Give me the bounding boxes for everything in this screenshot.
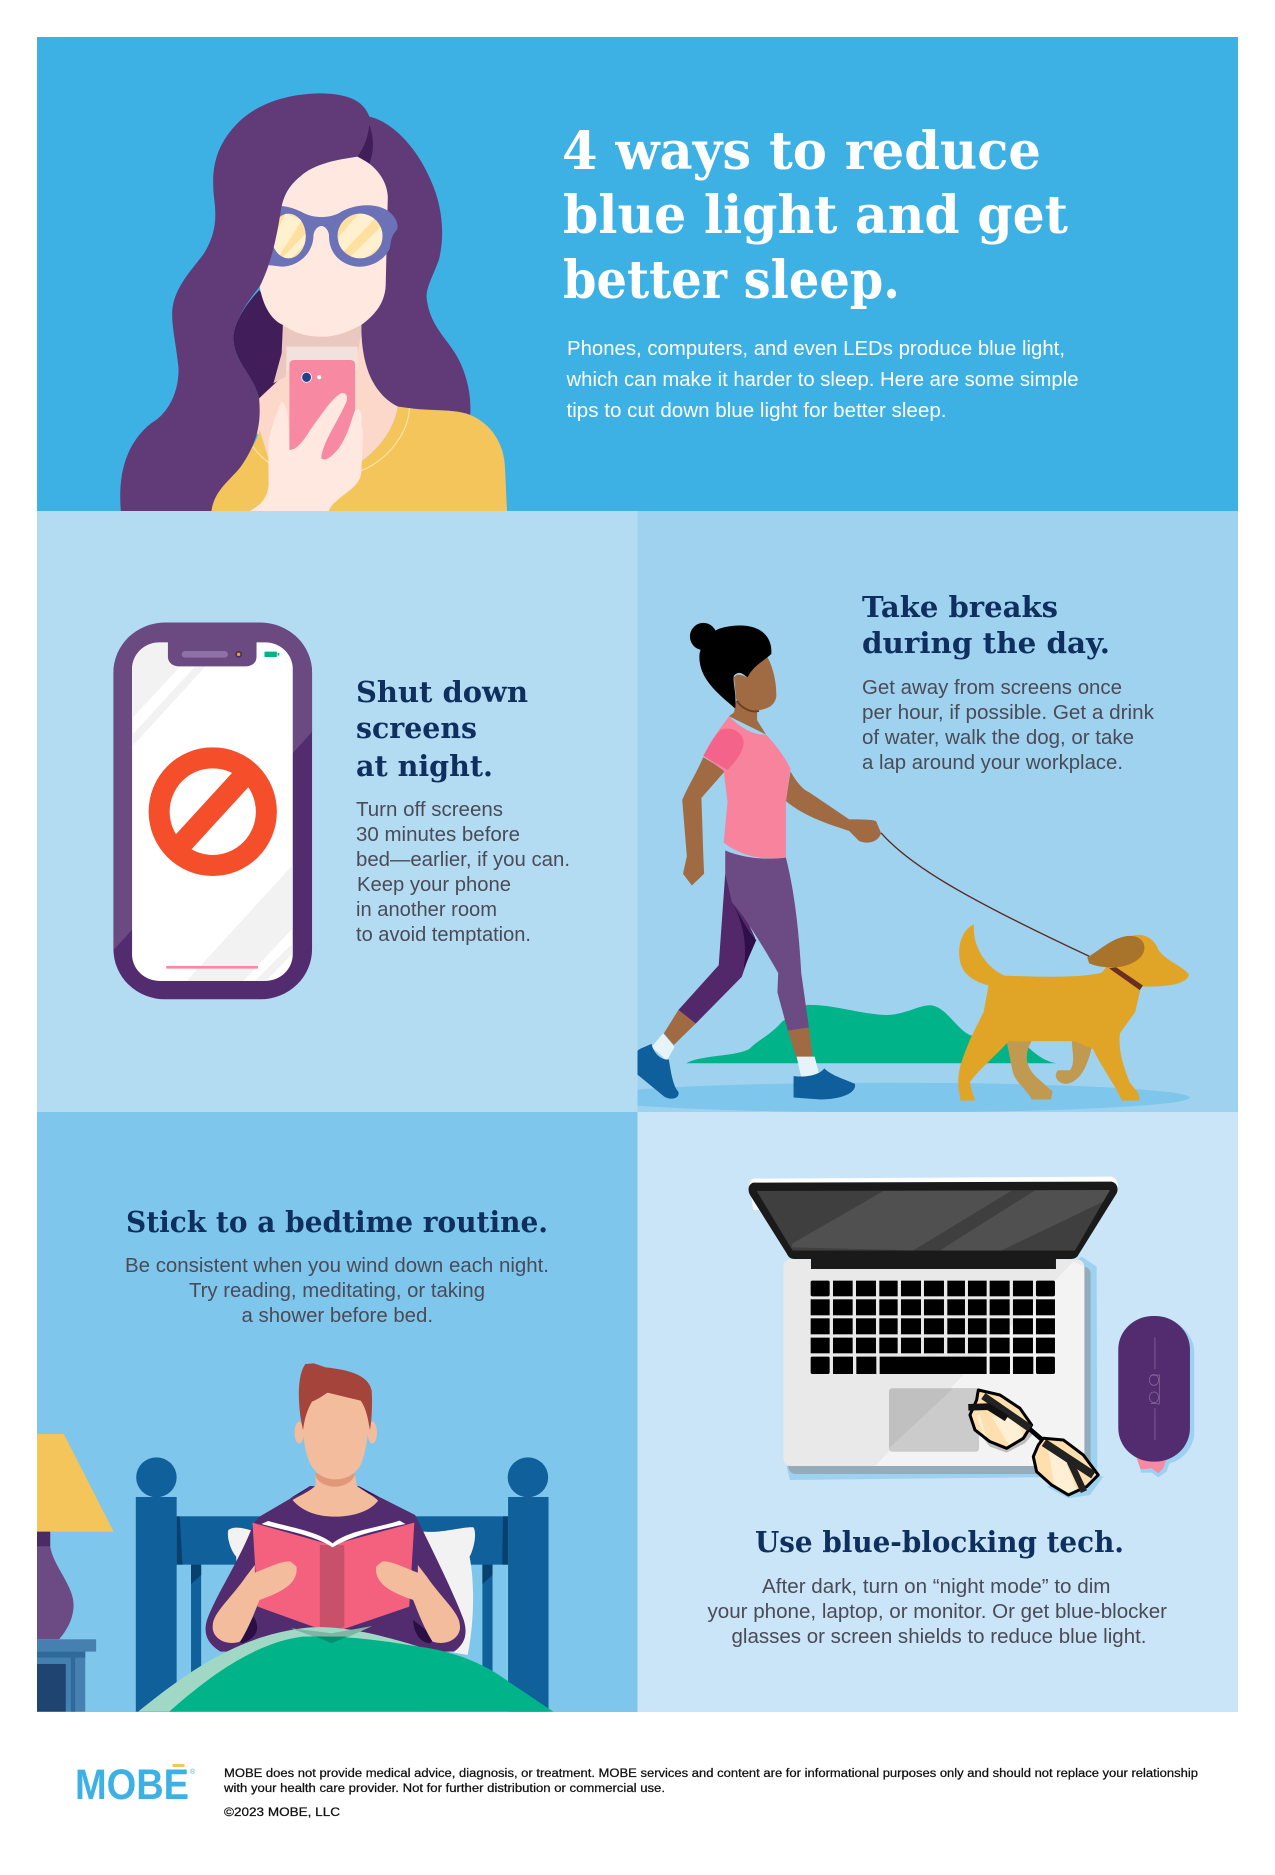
body text: a lap around your workplace.: [862, 752, 1123, 774]
dog: [958, 924, 1189, 1101]
icon: phone with prohibition sign: [113, 622, 312, 1000]
illustration: laptop, glasses and case: [749, 1177, 1194, 1498]
hero heading: better sleep.: [563, 250, 900, 311]
footer disclaimer: [223, 1768, 1198, 1819]
face: [260, 157, 388, 337]
footer disclaimer: with your health care provider. Not for further distribution or commercial use.: [223, 1783, 665, 1795]
pillow: [228, 1527, 475, 1655]
bed frame: [136, 1457, 549, 1712]
hero body text: [565, 338, 1078, 422]
trackpad: [889, 1388, 979, 1452]
hero heading: blue light and get: [563, 185, 1068, 246]
heading: [862, 590, 1110, 660]
panel: bedtime routine: [37, 1112, 638, 1712]
phone: [289, 360, 355, 460]
body text: Try reading, meditating, or taking: [189, 1280, 485, 1302]
glasses: [253, 205, 398, 267]
book: [253, 1521, 414, 1633]
heading: during the day.: [862, 626, 1110, 660]
footer disclaimer: ©2023 MOBE, LLC: [224, 1807, 340, 1819]
glasses case: [1118, 1316, 1194, 1477]
illustration: woman walking dog: [589, 623, 1190, 1112]
heading: [356, 675, 528, 783]
panel: take breaks: [589, 511, 1238, 1112]
body text: [356, 799, 570, 946]
body text: in another room: [356, 899, 497, 921]
illustration: woman with glasses holding a phone: [120, 93, 507, 511]
lamp and nightstand: [37, 1434, 114, 1712]
body text: Keep your phone: [357, 874, 511, 896]
screen: [749, 1177, 1118, 1210]
heading: Stick to a bedtime routine.: [126, 1205, 548, 1239]
body text: [125, 1255, 549, 1327]
body text: bed—earlier, if you can.: [356, 849, 570, 871]
glasses: [968, 1390, 1103, 1498]
woman: [632, 623, 881, 1099]
body text: [862, 677, 1155, 774]
heading: Shut down: [356, 675, 528, 709]
heading: at night.: [356, 749, 493, 783]
body text: to avoid temptation.: [356, 924, 531, 946]
panel: shut down screens: [37, 511, 638, 1112]
body text: per hour, if possible. Get a drink: [862, 702, 1155, 724]
logo: MOBE: ®: [190, 1768, 196, 1776]
body text: glasses or screen shields to reduce blue light.: [732, 1626, 1146, 1648]
logo: MOBE: MOBE: [75, 1761, 189, 1809]
body text: Get away from screens once: [862, 677, 1122, 699]
hair front: [120, 93, 369, 511]
body text: 30 minutes before: [356, 824, 520, 846]
panel: hero: [37, 37, 1238, 511]
hero heading: [562, 121, 1068, 311]
body text: Turn off screens: [356, 799, 503, 821]
hero heading: 4 ways to reduce: [562, 121, 1041, 182]
body text: After dark, turn on “night mode” to dim: [762, 1576, 1110, 1598]
body text: your phone, laptop, or monitor. Or get blue-blocker: [708, 1601, 1167, 1623]
panel: blue-blocking tech: [638, 1112, 1238, 1712]
blanket: [138, 1626, 553, 1712]
body text: Be consistent when you wind down each night.: [125, 1255, 549, 1277]
heading: Use blue-blocking tech.: [755, 1525, 1124, 1559]
hand: [250, 393, 363, 511]
keyboard: [811, 1281, 1055, 1374]
man: [206, 1363, 466, 1652]
hero body text: Phones, computers, and even LEDs produce blue light,: [567, 338, 1065, 360]
laptop: [749, 1177, 1118, 1480]
body text: of water, walk the dog, or take: [862, 727, 1134, 749]
leash: [881, 833, 1089, 956]
illustration: man reading in bed with lamp: [37, 1363, 553, 1712]
body text: [708, 1576, 1167, 1648]
hinge: [811, 1255, 1056, 1269]
footer disclaimer: MOBE does not provide medical advice, diagnosis, or treatment. MOBE services and content are for informational purposes only and should not replace your relationship: [224, 1768, 1198, 1780]
heading: screens: [356, 711, 477, 745]
hands: [213, 1561, 460, 1643]
hero body text: tips to cut down blue light for better sleep.: [566, 400, 946, 422]
body text: a shower before bed.: [242, 1305, 433, 1327]
shirt: [211, 407, 507, 511]
heading: Take breaks: [862, 590, 1058, 624]
hero body text: which can make it harder to sleep. Here are some simple: [565, 369, 1078, 391]
